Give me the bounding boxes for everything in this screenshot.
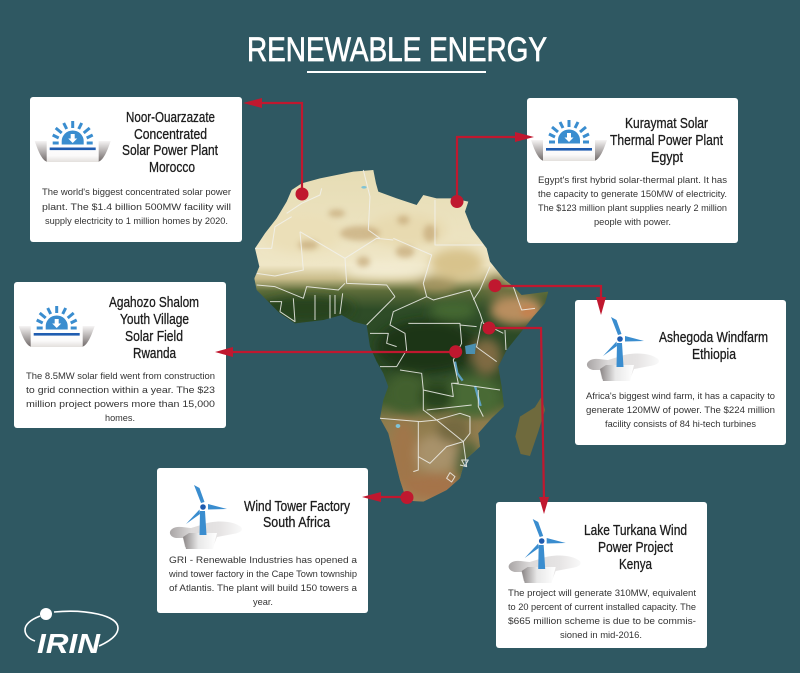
body text: year.	[253, 597, 273, 607]
heading: Thermal Power Plant	[610, 132, 724, 149]
panel: Kuraymat, Egypt	[527, 98, 738, 243]
heading: Lake Turkana Wind	[584, 522, 687, 539]
icon: solar	[35, 121, 111, 162]
body text: $665 million scheme is due to be commis-	[508, 616, 696, 626]
arrow: Egypt	[450, 132, 534, 208]
body text: supply electricity to 1 million homes by 2020.	[45, 216, 228, 226]
heading: Morocco	[149, 159, 195, 176]
icon: wind turbine	[509, 519, 581, 583]
body text: homes.	[105, 413, 135, 423]
body text	[586, 391, 775, 429]
heading: Rwanda	[133, 345, 177, 362]
arrow: Rwanda	[215, 345, 462, 358]
icon: wind turbine	[170, 485, 242, 549]
panel: Lake Turkana, Kenya	[496, 502, 707, 648]
body text: wind tower factory in the Cape Town township	[168, 569, 357, 579]
body text	[508, 588, 696, 640]
heading	[584, 522, 687, 573]
icon: wind turbine	[587, 317, 659, 381]
arrow: South Africa	[362, 491, 414, 504]
heading	[659, 329, 768, 363]
body text	[42, 187, 231, 226]
heading: Agahozo Shalom	[109, 294, 199, 311]
body text	[168, 555, 358, 607]
body text: of Atlantis. The plant will build 150 towers a	[169, 583, 358, 593]
heading	[122, 109, 219, 176]
heading: South Africa	[263, 514, 331, 531]
body text: The 8.5MW solar field went from construction	[26, 371, 215, 381]
panel: Noor-Ouarzazate, Morocco	[30, 97, 242, 242]
panel: Wind Tower Factory, South Africa	[157, 468, 368, 613]
arrow: Kenya	[482, 322, 549, 514]
lakes	[455, 362, 481, 406]
heading: Kenya	[619, 556, 652, 573]
body text: plant. The $1.4 billion 500MW facility will	[42, 202, 231, 212]
title: RENEWABLE ENERGY	[247, 31, 547, 69]
body text: people with power.	[594, 217, 671, 227]
heading: Youth Village	[120, 311, 189, 328]
panel: Agahozo Shalom, Rwanda	[14, 282, 226, 428]
heading: Kuraymat Solar	[625, 115, 708, 132]
heading	[109, 294, 199, 362]
body text: million project powers more than 15,000	[26, 399, 215, 409]
heading: Noor-Ouarzazate	[126, 109, 215, 126]
heading: Concentrated	[134, 126, 207, 143]
body text: facility consists of 84 hi-tech turbines	[605, 419, 756, 429]
body text: Africa's biggest wind farm, it has a capacity to	[586, 391, 775, 401]
map of Africa	[247, 167, 557, 507]
body text: Egypt's first hybrid solar-thermal plant. It has	[538, 175, 727, 185]
heading: Wind Tower Factory	[244, 498, 350, 515]
logo: IRIN: IRIN	[37, 628, 101, 659]
icon: solar	[531, 120, 607, 161]
arrow: Ethiopia	[488, 279, 606, 315]
country borders	[255, 170, 535, 482]
body text	[26, 371, 215, 423]
heading	[244, 498, 350, 531]
icon: solar	[19, 306, 95, 347]
body text: to grid connection within a year. The $23	[26, 385, 215, 395]
body text: GRI - Renewable Industries has opened a	[169, 555, 358, 565]
logo: IRIN	[25, 608, 118, 659]
heading	[610, 115, 724, 166]
heading: Ethiopia	[692, 346, 737, 363]
heading: Ashegoda Windfarm	[659, 329, 768, 346]
panel: Ashegoda, Ethiopia	[575, 300, 786, 445]
body text	[538, 175, 727, 227]
arrow: Morocco	[243, 98, 308, 200]
body text: generate 120MW of power. The $224 million	[586, 405, 775, 415]
heading: Power Project	[598, 539, 674, 556]
heading: Solar Power Plant	[122, 142, 219, 159]
heading: Egypt	[651, 149, 684, 166]
body text: the capacity to generate 150MW of electricity.	[538, 189, 727, 199]
body text: to 20 percent of current installed capacity. The	[508, 602, 696, 612]
body text: The $123 million plant supplies nearly 2 million	[538, 203, 727, 213]
body text: sioned in mid-2016.	[560, 630, 642, 640]
body text: The project will generate 310MW, equivalent	[508, 588, 696, 598]
body text: The world's biggest concentrated solar power	[42, 187, 231, 197]
icon: Madagascar island	[515, 397, 545, 456]
heading: Solar Field	[125, 328, 183, 345]
